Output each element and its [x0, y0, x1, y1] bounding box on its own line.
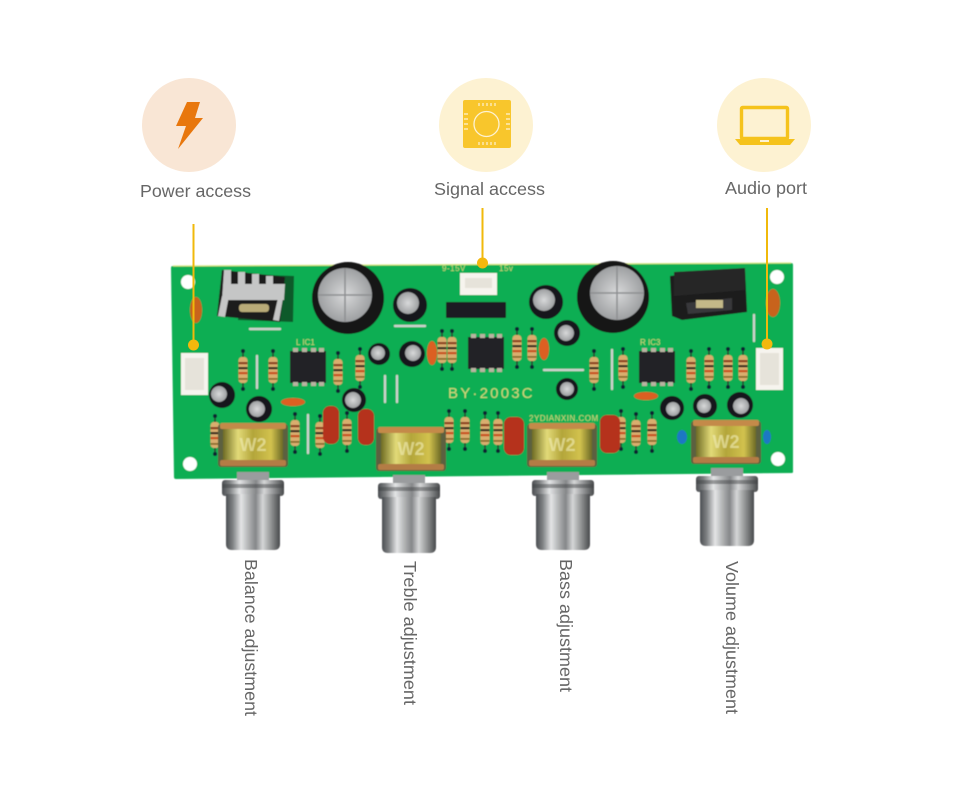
label: power access: Power access [140, 181, 251, 201]
label: signal access: Signal access [434, 179, 545, 199]
small electrolytic capacitors [209, 285, 753, 422]
connector: signal input top [460, 273, 497, 295]
black regulator bar [446, 302, 506, 318]
icon group: signal access [439, 78, 533, 172]
board silkscreen text: R IC3 [640, 338, 661, 347]
blue capacitors [677, 430, 771, 444]
callout line: signal access [477, 208, 488, 268]
mounting holes [181, 270, 785, 471]
label: volume adjustment: Volume adjustment [722, 561, 742, 714]
integrated circuits [290, 334, 675, 386]
label: bass adjustment: Bass adjustment [556, 559, 576, 692]
jumper wires [250, 315, 754, 453]
callout line: audio port [762, 208, 772, 350]
board silkscreen text: BY·2003C [448, 385, 535, 402]
red film capacitors [323, 406, 620, 455]
PCB base [171, 263, 793, 479]
icon: chip [463, 100, 511, 148]
board silkscreen text [296, 264, 661, 423]
knob shafts [222, 468, 758, 553]
PCB top edge [173, 263, 791, 266]
icon: lightning bolt [176, 102, 203, 149]
right heat sink [670, 268, 747, 320]
connector: power left [181, 353, 208, 395]
label: audio port: Audio port [725, 178, 807, 198]
resistors [210, 327, 748, 456]
orange ceramic capacitors [190, 289, 780, 406]
icon group: power access [142, 78, 236, 172]
circuit board photo [171, 261, 793, 553]
callout line: power access [188, 224, 199, 350]
potentiometers [218, 420, 761, 471]
board silkscreen text: 9-15V [442, 264, 466, 273]
label: treble adjustment: Treble adjustment [400, 561, 420, 705]
icon group: audio port [717, 78, 811, 172]
label: balance adjustment: Balance adjustment [241, 559, 261, 716]
connector: audio right [756, 348, 783, 390]
board silkscreen text: L IC1 [296, 338, 315, 347]
large capacitors [312, 261, 649, 334]
left heat sink [217, 270, 294, 322]
board silkscreen text: 2YDIANXIN.COM [529, 414, 599, 423]
board silkscreen text: 15v [499, 264, 513, 273]
icon: laptop [735, 108, 795, 145]
